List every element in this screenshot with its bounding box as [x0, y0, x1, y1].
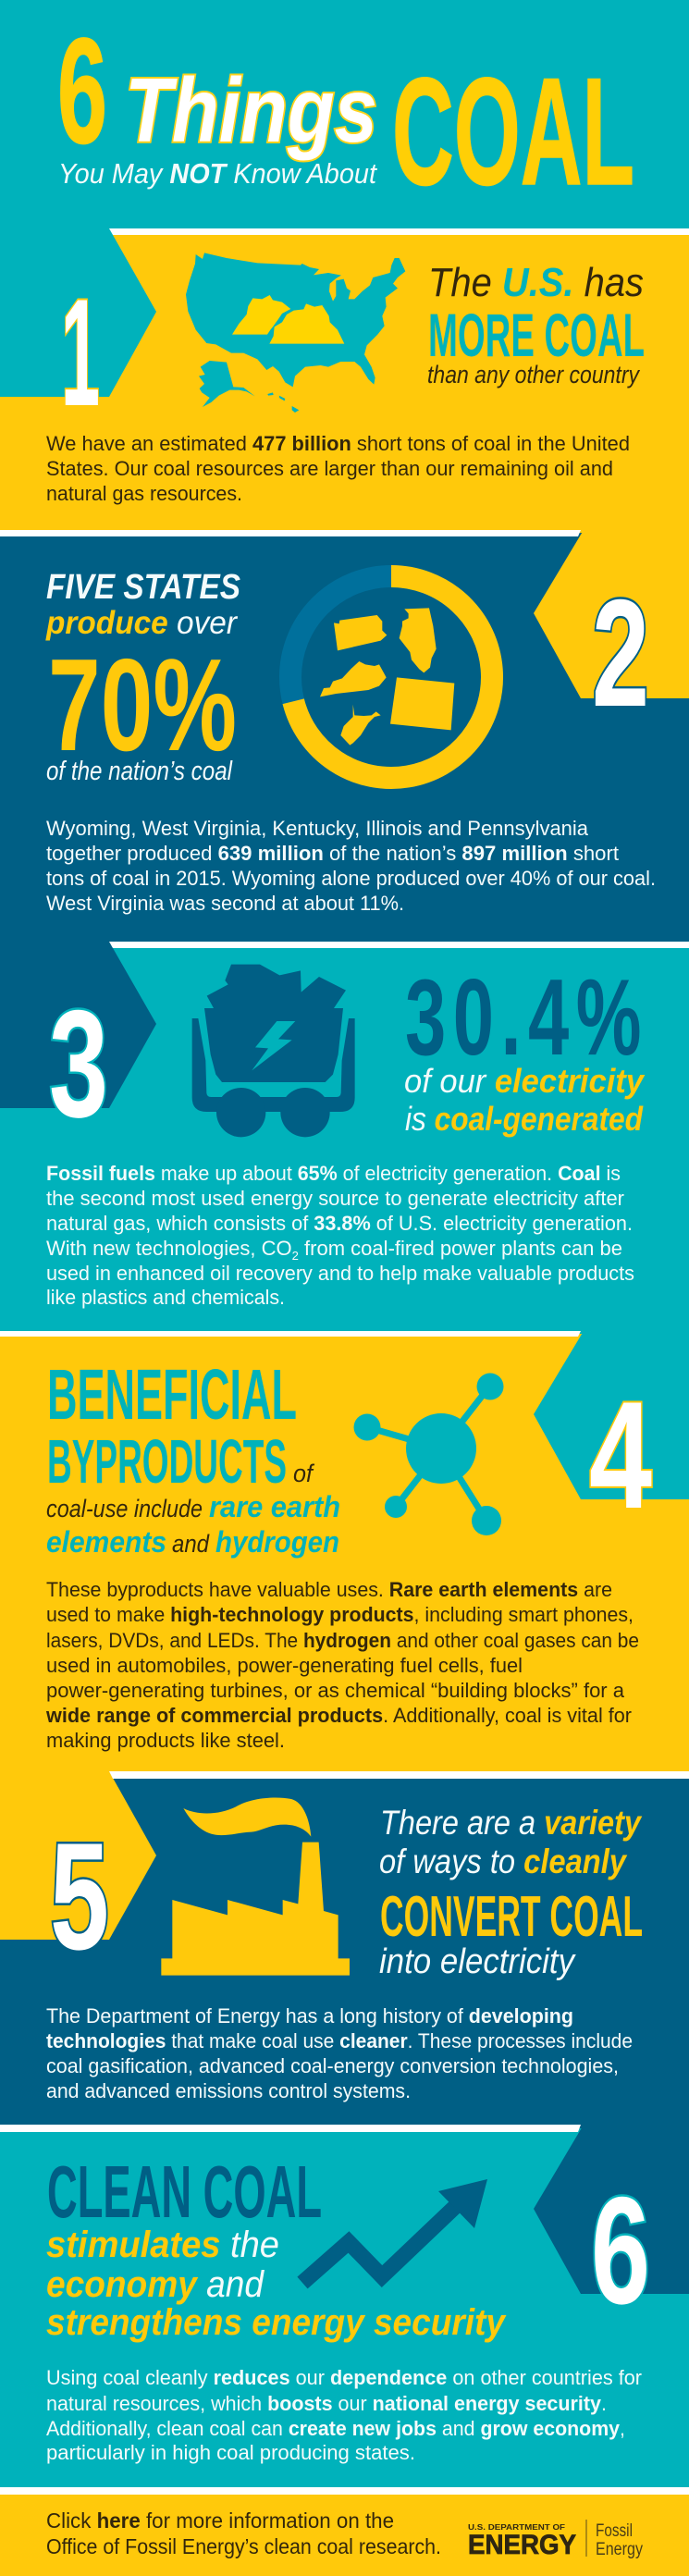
logo: U.S. Department of Energy, Fossil Energy: U.S. DEPARTMENT OF: [468, 2523, 565, 2532]
stat: 30.4%: 30.4%: [405, 957, 648, 1078]
chevron: section 6: [534, 2125, 689, 2294]
text block: section 5 body: The Department of Energy has a long history of developing: [46, 2004, 573, 2028]
number 4: 4: [589, 1370, 652, 1540]
icon: rising arrow: [302, 2179, 487, 2283]
text block: section 5 body: technologies that make coal use cleaner. These processes include: [46, 2029, 633, 2052]
heading line: The U.S. has: The U.S. has: [428, 260, 644, 305]
icon: five coal states: [320, 608, 454, 746]
heading line: coal-use include: coal-use include: [46, 1495, 203, 1522]
heading: The U.S. has more coal: [427, 260, 645, 388]
text block: footer call to action: Office of Fossil Energy’s clean coal research.: [46, 2534, 441, 2558]
white band: section 5: [109, 1771, 689, 1779]
text block: section 6 body: Additionally, clean coal can create new jobs and grow economy,: [46, 2417, 625, 2440]
chevron: section 4: [534, 1331, 689, 1499]
heading line: FIVE STATES: FIVE STATES: [46, 568, 240, 607]
white band: section 4: [0, 1331, 581, 1337]
text block: section 3 body: With new technologies, CO: [46, 1237, 291, 1260]
text block: section 4 body: used in automobiles, power-generating fuel cells, fuel: [46, 1654, 523, 1677]
text block: section 6 body: Using coal cleanly reduces our dependence on other countries for: [46, 2366, 642, 2389]
text block: section 4 body: These byproducts have valuable uses. Rare earth elements are: [46, 1578, 612, 1601]
white band: section 3: [109, 942, 689, 948]
text block: footer call to action: Click here for more information on the: [46, 2508, 394, 2533]
text block: section 4 body: lasers, DVDs, and LEDs. The hydrogen and other coal gases can be: [46, 1629, 639, 1652]
text block: section 3 body: used in enhanced oil recovery and to help make valuable products: [46, 1262, 634, 1285]
heading line: hydrogen: hydrogen: [215, 1525, 339, 1559]
white band: footer: [0, 2487, 689, 2495]
heading line: rare earth: rare earth: [209, 1490, 340, 1523]
chevron: section 2: [534, 530, 689, 698]
text block: section 3 body: from coal-fired power plants can be: [299, 1237, 622, 1260]
text block: section 1 body: States. Our coal resources are larger than our remaining oil and: [46, 457, 613, 480]
chart: 70% donut ring: [290, 576, 492, 778]
icon: factory with smoke: [161, 1797, 350, 1976]
heading line: than any other country: than any other country: [427, 361, 640, 388]
heading: 30.4% of our electricity: [404, 957, 648, 1138]
logo: U.S. Department of Energy, Fossil Energy: Fossil: [596, 2521, 633, 2541]
text block: section 3 body: like plastics and chemicals.: [46, 1286, 285, 1309]
text block: section 6 body: [46, 2366, 642, 2464]
number 6: 6: [591, 2165, 650, 2336]
heading line: of our electricity: of our electricity: [404, 1062, 646, 1100]
icon: US map: [186, 253, 405, 413]
heading: five states produce over 70%: [45, 568, 240, 786]
number 2: 2: [592, 568, 649, 738]
text block: section 1 body: We have an estimated 477 billion short tons of coal in the United: [46, 432, 630, 455]
text block: section 4 body: wide range of commercial products. Additionally, coal is vital for: [45, 1704, 632, 1727]
text block: section 3 body: the second most used energy source to generate electricity after: [46, 1187, 624, 1210]
text block: section 2 body: [46, 817, 656, 915]
panel: section 1 background: [0, 235, 689, 533]
icon: molecule: [353, 1373, 503, 1535]
chevron: section 3: [0, 942, 156, 1108]
text block: section 1 body: natural gas resources.: [46, 482, 242, 505]
heading line: produce over: produce over: [45, 605, 238, 641]
heading line: BYPRODUCTS: BYPRODUCTS: [47, 1427, 287, 1497]
heading line: strengthens energy security: strengthens energy security: [46, 2302, 507, 2343]
title: Things: Things: [125, 59, 377, 161]
text block: section 5 body: and advanced emissions control systems.: [46, 2079, 411, 2102]
heading: beneficial byproducts: [46, 1355, 340, 1559]
text block: section 2 body: tons of coal in 2015. Wyoming alone produced over 40% of our coal.: [46, 867, 656, 890]
text block: section 4 body: making products like steel.: [46, 1729, 285, 1752]
text block: section 5 body: [46, 2004, 633, 2102]
text block: section 3 body: [46, 1162, 634, 1309]
heading word: of: of: [293, 1460, 314, 1487]
text block: section 2 body: West Virginia was second at about 11%.: [46, 892, 404, 915]
text: 1: [61, 267, 100, 438]
heading line: There are a variety: There are a variety: [380, 1804, 643, 1842]
stat: 70%: 70%: [48, 632, 237, 779]
title: You May NOT Know About: You May NOT Know About: [58, 157, 377, 190]
heading line: is coal-generated: is coal-generated: [405, 1100, 644, 1138]
number 5: 5: [50, 1811, 109, 1981]
heading line: BENEFICIAL: BENEFICIAL: [47, 1355, 297, 1435]
white band: section 2: [0, 530, 581, 536]
panel: section 2 background: [0, 533, 689, 945]
heading line: stimulates the: stimulates the: [46, 2225, 279, 2265]
text block: section 3 body: natural gas, which consists of 33.8% of U.S. electricity generation.: [46, 1212, 633, 1235]
heading line: into electricity: into electricity: [379, 1942, 576, 1981]
text block: footer call to action: [46, 2508, 441, 2558]
heading line: elements: elements: [46, 1525, 166, 1559]
heading line: of ways to cleanly: of ways to cleanly: [379, 1843, 628, 1880]
chevron: section 1: [0, 228, 156, 397]
heading line: of the nation's coal: of the nation’s coal: [46, 757, 233, 786]
title: [57, 7, 634, 216]
heading line: and: and: [172, 1530, 210, 1558]
panel: title header background: [0, 0, 689, 235]
panel: section 5 background: [0, 1775, 689, 2128]
heading line: economy and: economy and: [46, 2264, 265, 2305]
white band: section 1: [109, 228, 689, 235]
text block: section 3 body: 2: [292, 1249, 299, 1263]
text block: section 5 body: coal gasification, advanced coal-energy conversion technologies,: [46, 2054, 619, 2077]
heading: ways to cleanly convert coal: [379, 1804, 643, 1981]
panel: section 4 background: [0, 1334, 689, 1775]
panel: section 6 background: [0, 2128, 689, 2491]
text block: section 4 body: [45, 1578, 639, 1752]
text block: section 4 body: power-generating turbines, or as chemical “building blocks” for a: [46, 1679, 625, 1702]
text block: section 6 body: natural resources, which boosts our national energy security.: [46, 2392, 607, 2415]
text block: section 2 body: Wyoming, West Virginia, Kentucky, Illinois and Pennsylvania: [46, 817, 589, 840]
text block: section 1 body: [46, 432, 630, 505]
title: 6: 6: [57, 7, 107, 175]
text block: section 3 body: Fossil fuels make up about 65% of electricity generation. Coal is: [46, 1162, 621, 1185]
logo: U.S. Department of Energy, Fossil Energy: Energy: [596, 2540, 643, 2559]
text block: section 4 body: used to make high-technology products, including smart phones,: [46, 1603, 634, 1626]
panel: footer background: [0, 2491, 689, 2576]
chevron: section 5: [0, 1771, 156, 1940]
logo: U.S. Department of Energy, Fossil Energy: ENERGY: [468, 2530, 576, 2560]
heading: clean coal stimulates the economy: [46, 2151, 507, 2343]
icon: coal cart with lightning bolt: [192, 965, 355, 1137]
panel: section 3 background: [0, 945, 689, 1334]
number 3: 3: [49, 979, 108, 1149]
text block: section 6 body: particularly in high coal producing states.: [46, 2441, 415, 2464]
text block: section 2 body: together produced 639 million of the nation’s 897 million short: [46, 842, 619, 865]
heading line: CLEAN COAL: CLEAN COAL: [47, 2151, 322, 2233]
logo: U.S. Department of Energy, Fossil Energy: [468, 2520, 643, 2560]
white band: section 6: [0, 2125, 581, 2132]
